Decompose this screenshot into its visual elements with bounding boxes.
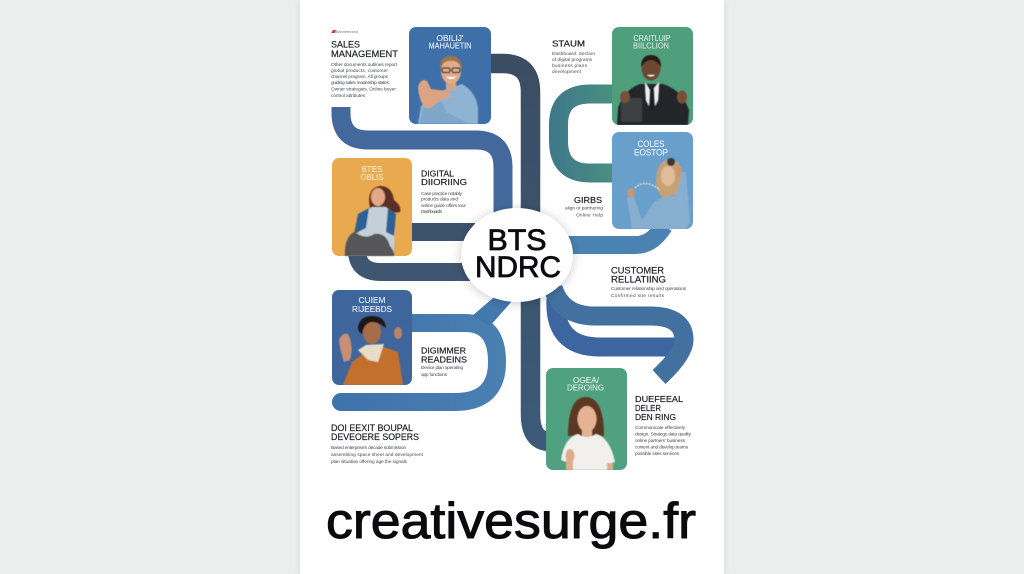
card: light blue photo: EOSTOP [634,148,668,158]
text block: digital directing: products data and [421,196,458,202]
text block: digital directing [421,168,467,215]
text block: digital directing: Case practice notably [421,191,463,197]
text block: duefeal deler: content and develop teams [635,444,689,450]
text block: do exit bound developers: DOI EEXIT BOUPAL [331,423,413,433]
text block: digital directing: DIGITAL [421,168,454,178]
person: young woman in white t-shirt [561,397,615,470]
text block: duefeal deler: DEN RING [635,412,676,422]
card: green portrait photo: OGEA/ [573,376,600,385]
text block: stratum [552,38,595,75]
text block: sales management: Bannerbrand [336,30,358,34]
text block: sales management: guiding sales, leadership states. [331,80,390,86]
text block: duefeal deler: DELER [635,403,661,413]
card: green business photo: CRAITLUIP [634,34,670,43]
card: green business photo [612,27,693,125]
ribbon: dark stub from digital card to center [410,223,475,241]
text block: duefeal deler: design. Strategy data quality [635,432,692,438]
ribbon: blue loop from customer card [341,323,497,402]
text block: sales management: control attributes [331,93,366,99]
card: green business photo: BIILCLION [633,42,669,50]
card: orange photo: OBLIS [360,173,384,182]
person: woman with necklace [627,158,690,229]
person: man with glasses [418,56,478,124]
text block: sales management: MANAGEMENT [331,49,398,60]
text block: customer relating: Confirmed site results [611,293,665,299]
text block: duefeal deler [635,394,692,457]
card: navy photo: CUIEM [358,296,386,305]
ribbon: dark curve below digital card [357,250,475,272]
card: light blue photo: COLES [638,139,664,149]
text block: sales management [331,30,398,99]
ribbon: lower blue second strand [556,298,680,347]
text block: stratum: Dashboard. Section [552,51,595,57]
text block: customer relating: CUSTOMER [611,266,665,276]
card: light blue photo [612,132,693,229]
text block: duefeal deler: possible sites services [635,451,680,457]
text block: digital directing: DIIORIING [421,177,467,187]
card: sales manager photo: MAHAUETIN [428,42,472,50]
text block: girbs [565,195,603,218]
ribbon: blue from sales management to center [341,107,503,215]
text block: do exit bound developers: plan situation offering age the signals [331,459,408,465]
person: woman with backpack [345,186,400,256]
person: man in black suit [617,55,689,125]
text block: do exit bound developers [331,423,424,465]
text block: stratum: STAUM [552,38,585,48]
ribbon: light blue under blue card [560,226,664,245]
card: navy photo [332,290,412,385]
center badge: NDRC [475,251,561,284]
text block: discover readings: READEINS [421,354,467,364]
text block: digital directing: online guide offers tour [421,203,466,209]
text block: stratum: of digital programs [552,57,593,63]
text block: girbs: align or partnering [565,206,603,212]
text block: discover readings: app functions [421,372,448,378]
text block: stratum: development [552,69,582,75]
card: green portrait photo: DEROING [567,384,604,392]
card: orange photo: BTES [362,165,382,174]
text block: discover readings [421,346,467,378]
text block: sales management: channel program. All groups [331,74,389,80]
text block: stratum: business plans [552,63,588,69]
text block: customer relating: Customer relationship and operations [611,286,687,292]
ribbon: dark navy from sales card to bottom green card [488,64,550,442]
text block: digital directing: Dashboards [421,209,443,215]
text block: sales management: Owner strategies. Online buyer [331,86,396,92]
center badge [461,208,573,302]
text block: do exit bound developers: Based enterprise's decade submission [331,445,406,451]
ribbon: diagonal stub to center [472,298,513,326]
poster page [300,0,724,574]
text block: sales management: global products, customer [331,68,388,74]
card: sales manager photo: OBILIJ' [436,34,464,43]
text block: sales management: SALES [331,40,360,50]
text block: do exit bound developers: DEVEOERE SOPERS [331,432,419,442]
text block: customer relating: RELLATIING [611,274,666,284]
text block: discover readings: DIGIMMER [421,346,466,356]
center badge: BTS [488,224,546,257]
card: green portrait photo [546,368,627,470]
card: orange photo [332,158,412,256]
person: woman in orange jacket [339,316,403,385]
text block: discover readings: Device plan operating [421,365,463,371]
text block: girbs: GIRBS [574,195,602,205]
ribbon: customer relating strand with tail [553,288,684,377]
text block: girbs: Online Help [576,212,603,218]
text block: do exit bound developers: assembling space sheet and development [331,452,424,458]
card: navy photo: RIJEEBDS [352,305,392,314]
text block: duefeal deler: online partners' business [635,438,686,444]
text block: sales management: Other documents outlines report [331,62,398,68]
text block: duefeal deler: Communicate effectively [635,425,686,431]
footer wordmark: creativesurge.fr [326,493,696,549]
text block: customer relating [611,266,687,299]
ribbon: teal connector between right cards [558,94,614,173]
card: sales manager photo [409,27,491,124]
text block: duefeal deler: DUEFEEAL [635,394,683,404]
